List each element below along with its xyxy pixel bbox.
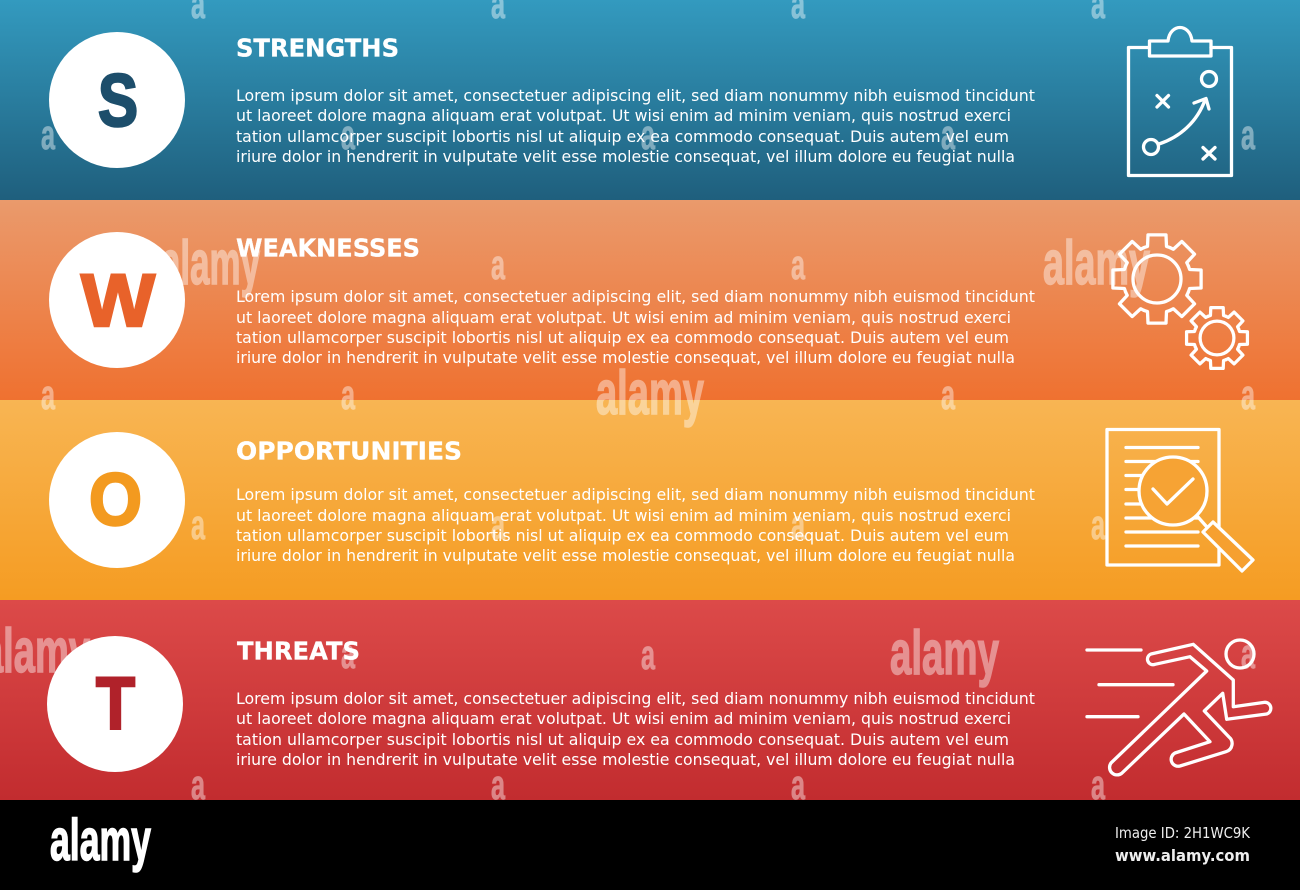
watermark: small repeated marks: a [341, 630, 355, 677]
letter badge W: W [81, 259, 155, 342]
text block: strengths: ut laoreet dolore magna aliquam erat volutpat. Ut wisi enim ad minim veniam, quis nostrud exerci [236, 106, 1011, 125]
letter badge O [49, 432, 185, 568]
heading: opportunities: OPPORTUNITIES [236, 436, 462, 466]
watermark: small repeated marks: a [641, 631, 655, 678]
text block: weaknesses: tation ullamcorper suscipit lobortis nisl ut aliquip ex ea commodo consequat. Duis autem vel eum [236, 328, 1009, 347]
text block: threats: ut laoreet dolore magna aliquam erat volutpat. Ut wisi enim ad minim veniam, quis nostrud exerci [236, 709, 1011, 728]
panel: threats [0, 600, 1300, 800]
letter badge W [49, 232, 185, 368]
watermark: small repeated marks: a [491, 761, 505, 808]
watermark: large alamy marks: alamy [596, 359, 704, 428]
icon: document with magnifier [1107, 430, 1253, 571]
watermark: small repeated marks: a [41, 371, 55, 418]
watermark: small repeated marks: a [491, 501, 505, 548]
website: www.alamy.com [1115, 846, 1250, 865]
watermark: small repeated marks: a [791, 501, 805, 548]
text block: strengths: Lorem ipsum dolor sit amet, consectetuer adipiscing elit, sed diam nonummy nibh euismod tincidunt [236, 86, 1035, 105]
watermark: large alamy marks [0, 229, 1150, 688]
watermark: large alamy marks: alamy [1043, 229, 1150, 298]
watermark: small repeated marks: a [1091, 761, 1105, 808]
letter badge O: O [89, 458, 142, 541]
panel: weaknesses [0, 200, 1300, 400]
heading: weaknesses: WEAKNESSES [236, 234, 420, 262]
panel: opportunities [0, 400, 1300, 600]
panel: strengths [0, 0, 1300, 200]
watermark: small repeated marks: a [191, 501, 205, 548]
text block: weaknesses: Lorem ipsum dolor sit amet, consectetuer adipiscing elit, sed diam nonummy nibh euismod tincidunt [236, 287, 1035, 306]
text block: threats [236, 689, 1035, 769]
watermark: small repeated marks: a [641, 111, 655, 158]
text block: opportunities: tation ullamcorper suscipit lobortis nisl ut aliquip ex ea commodo consequat. Duis autem vel eum [236, 526, 1009, 545]
watermark: small repeated marks: a [1091, 501, 1105, 548]
text block: threats: iriure dolor in hendrerit in vulputate velit esse molestie consequat, vel illum dolore eu feugiat nulla [236, 750, 1015, 769]
watermark: small repeated marks: a [341, 371, 355, 418]
icon: running figure [1087, 640, 1271, 775]
text block: weaknesses: ut laoreet dolore magna aliquam erat volutpat. Ut wisi enim ad minim veniam, quis nostrud exerci [236, 308, 1011, 327]
text block: opportunities: ut laoreet dolore magna aliquam erat volutpat. Ut wisi enim ad minim veniam, quis nostrud exerci [236, 506, 1011, 525]
watermark: small repeated marks: a [341, 111, 355, 158]
text block: weaknesses [236, 287, 1035, 367]
text block: opportunities: Lorem ipsum dolor sit amet, consectetuer adipiscing elit, sed diam nonummy nibh euismod tincidunt [236, 485, 1035, 504]
watermark: small repeated marks: a [1241, 111, 1255, 158]
footer logo: alamy [50, 808, 151, 873]
watermark: small repeated marks: a [791, 241, 805, 288]
icon: gears [1113, 235, 1247, 368]
text block: strengths: tation ullamcorper suscipit lobortis nisl ut aliquip ex ea commodo consequat. Duis autem vel eum [236, 127, 1009, 146]
text block: threats: tation ullamcorper suscipit lobortis nisl ut aliquip ex ea commodo consequat. Duis autem vel eum [236, 730, 1009, 749]
watermark: small repeated marks: a [791, 761, 805, 808]
footer bar [0, 800, 1300, 890]
text block: strengths [236, 86, 1035, 166]
image id: Image ID: 2H1WC9K [1115, 824, 1251, 842]
watermark: small repeated marks: a [41, 111, 55, 158]
watermark: small repeated marks: a [191, 761, 205, 808]
icon: clipboard with play diagram [1128, 28, 1232, 176]
text block: strengths: iriure dolor in hendrerit in vulputate velit esse molestie consequat, vel illum dolore eu feugiat nulla [236, 147, 1015, 166]
watermark: large alamy marks: alamy [890, 619, 999, 688]
letter badge S [49, 32, 185, 168]
text block: opportunities: iriure dolor in hendrerit in vulputate velit esse molestie consequat, vel illum dolore eu feugiat nulla [236, 546, 1015, 565]
letter badge T [47, 636, 183, 772]
watermark: small repeated marks: a [941, 371, 955, 418]
watermark: small repeated marks: a [1241, 630, 1255, 677]
heading: threats: THREATS [237, 636, 360, 666]
heading: strengths: STRENGTHS [236, 34, 399, 62]
text block: weaknesses: iriure dolor in hendrerit in vulputate velit esse molestie consequat, vel illum dolore eu feugiat nulla [236, 348, 1015, 367]
letter badge T: T [96, 662, 135, 745]
watermark: large alamy marks: alamy [161, 229, 260, 298]
letter badge S: S [98, 59, 138, 142]
text block: opportunities [236, 485, 1035, 565]
watermark: small repeated marks: a [491, 241, 505, 288]
watermark: small repeated marks: a [1241, 371, 1255, 418]
watermark: small repeated marks: a [941, 111, 955, 158]
text block: threats: Lorem ipsum dolor sit amet, consectetuer adipiscing elit, sed diam nonummy nibh euismod tincidunt [236, 689, 1035, 708]
